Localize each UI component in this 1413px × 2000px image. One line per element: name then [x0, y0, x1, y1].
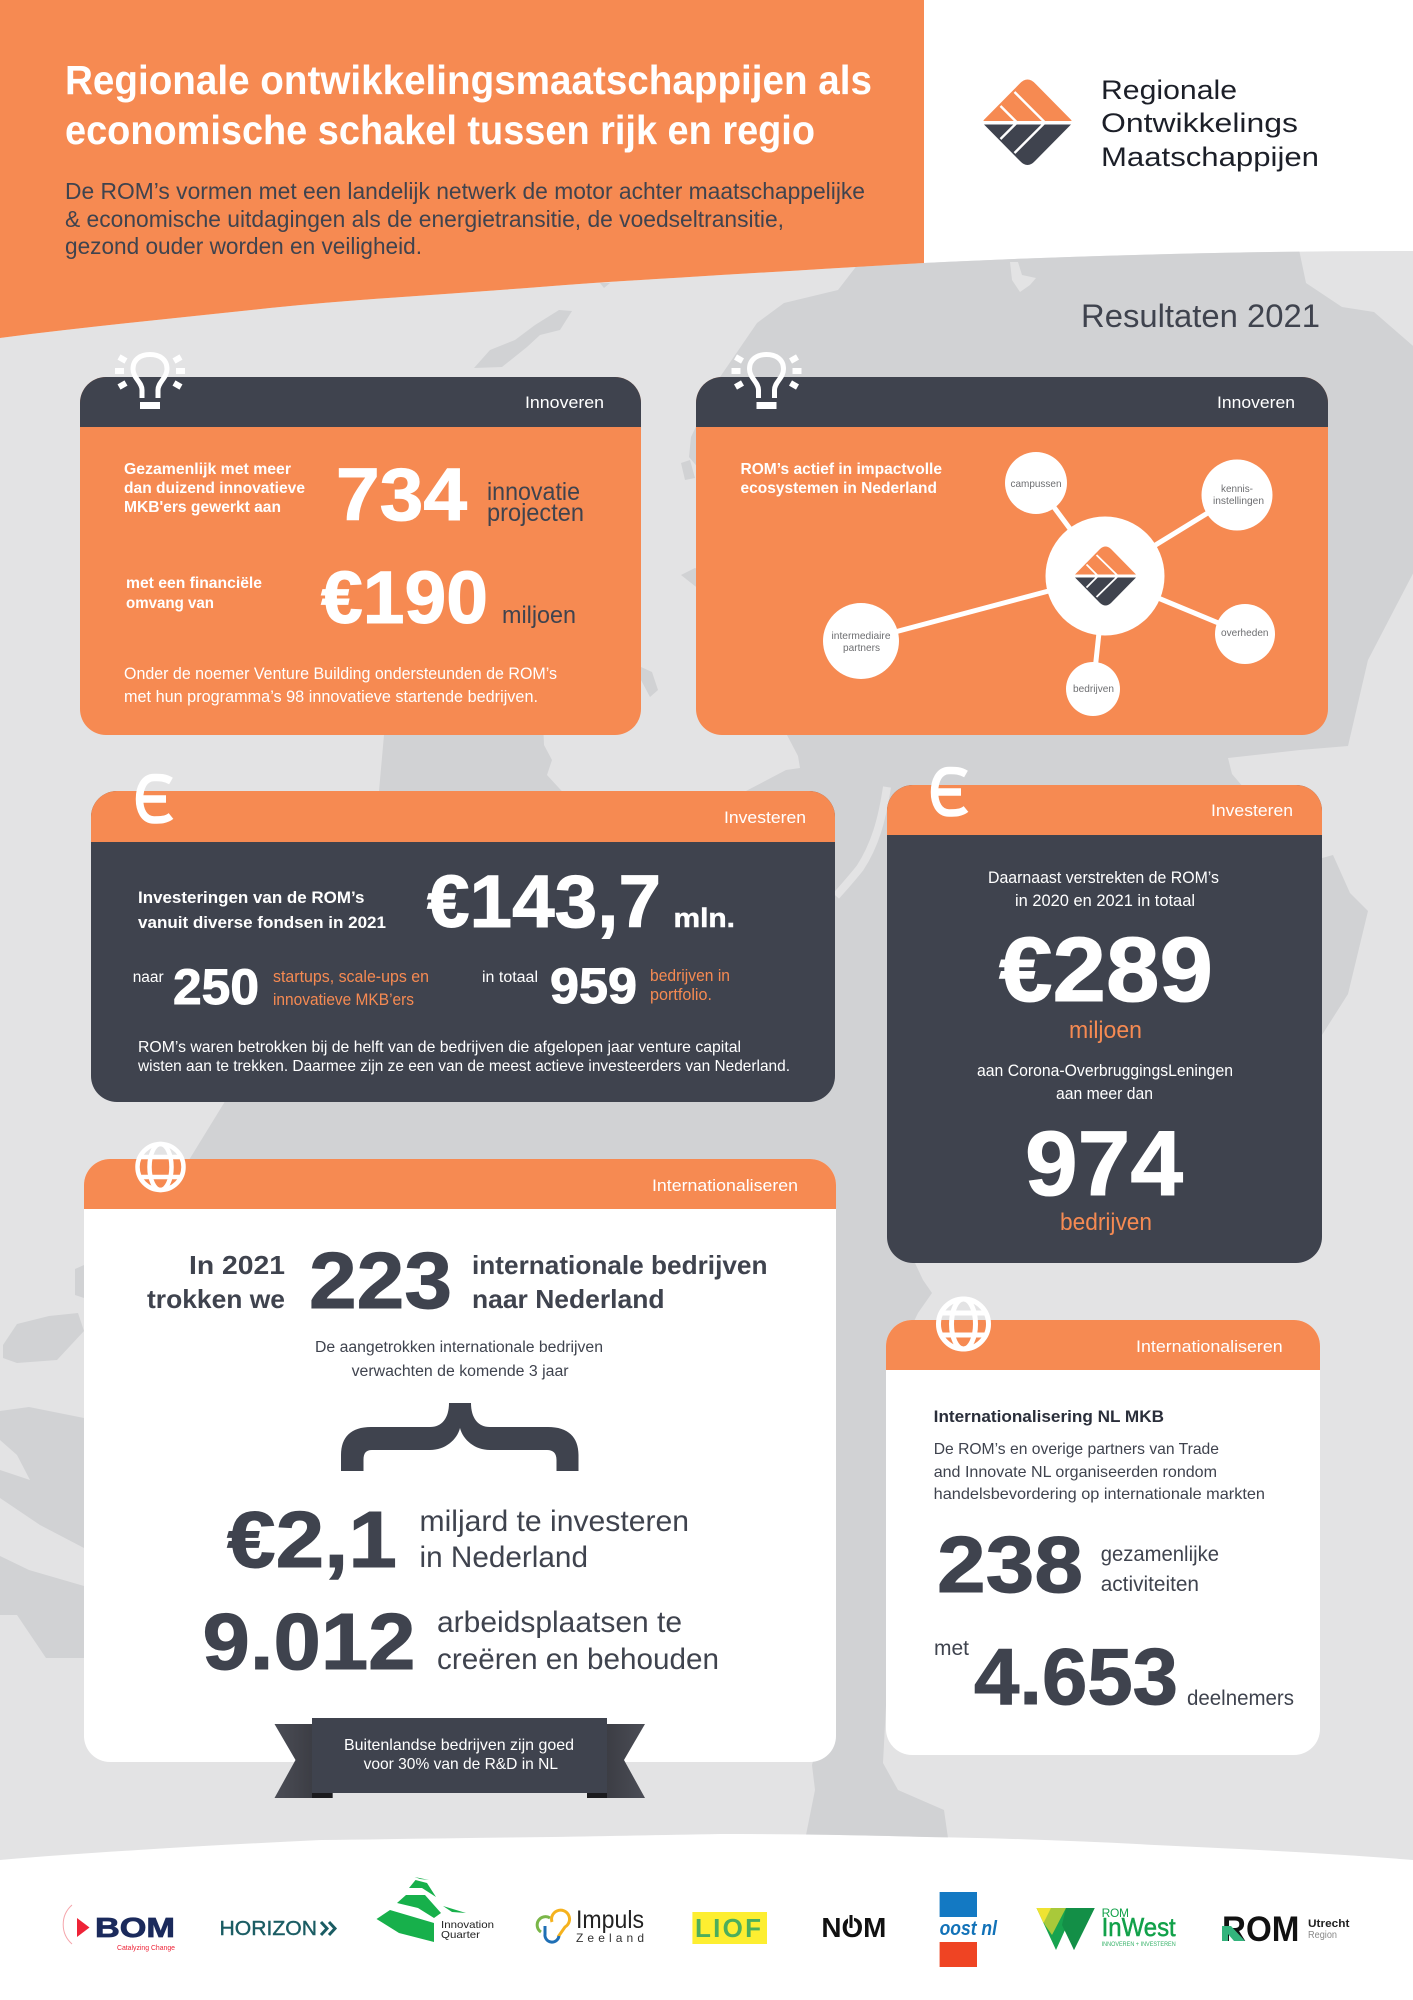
- stat group: 959 portfolio: in totaal: [482, 969, 538, 986]
- stat: 289: €289: [999, 919, 1213, 1021]
- logo: oost nl: oost nl: [940, 1918, 997, 1940]
- text: additional loans: [988, 869, 1219, 910]
- text: internationale bedrijven: naar Nederland: [472, 1284, 664, 1314]
- text: venture capital: wisten aan te trekken. Daarmee zijn ze een van de meest actieve investeerders van Nederland.: [137, 1058, 790, 1075]
- icon: curly brace: [341, 1403, 578, 1471]
- text: internationale bedrijven: internationale bedrijven: [472, 1250, 768, 1280]
- icon: light bulb: [115, 354, 185, 409]
- text: trade promotion: De ROM’s en overige partners van Trade: [934, 1441, 1219, 1458]
- label: miljoen: miljoen: [1069, 1017, 1142, 1044]
- text: venture building: Onder de noemer Venture Building ondersteunden de ROM’s: [124, 665, 557, 683]
- label: innovatie projecten: projecten: [487, 499, 584, 527]
- icon: ROM logo: [984, 80, 1071, 165]
- text: expectations: De aangetrokken internationale bedrijven: [315, 1339, 603, 1356]
- panel: Investeren funds: [91, 777, 835, 1102]
- logo: Innovation Quarter: [376, 1877, 494, 1942]
- text: venture capital: ROM’s waren betrokken bij de helft van de bedrijven die afgelopen jaar venture capital: [138, 1039, 741, 1056]
- label: bedrijven: bedrijven: [1060, 1209, 1152, 1236]
- stat group: 959 portfolio: [482, 958, 730, 1014]
- icon: ROM logo small: [1075, 546, 1136, 606]
- stat: 9.012 jobs: arbeidsplaatsen te: [437, 1606, 682, 1639]
- intro text: [65, 178, 865, 259]
- header label: Innoveren: [1217, 393, 1295, 412]
- icon: globe: [138, 1144, 184, 1190]
- label: gezamenlijke activiteiten: activiteiten: [1101, 1573, 1199, 1596]
- stat group: 250 startups: 250: [173, 959, 259, 1015]
- text: expectations: verwachten de komende 3 jaar: [352, 1363, 569, 1380]
- logo: LIOF: LIOF: [695, 1913, 761, 1943]
- node: campussen: campussen: [1010, 478, 1062, 490]
- text: trade promotion: and Innovate NL organiseerden rondom: [934, 1464, 1217, 1481]
- stat: 4.653: 4.653: [974, 1632, 1178, 1721]
- stat group: 250 startups: startups, scale-ups en: [273, 968, 429, 986]
- text: expectations: [315, 1339, 603, 1380]
- stat group: 959 portfolio: bedrijven in: [650, 967, 730, 985]
- stat: 9.012 jobs: 9.012: [202, 1597, 416, 1686]
- ribbon callout: voor 30% van de R&D in NL: [364, 1756, 558, 1773]
- stat: 2,1 miljard: €2,1: [227, 1495, 397, 1584]
- text: ecosystems: ecosystemen in Nederland: [740, 480, 937, 497]
- text: intro: [124, 461, 305, 516]
- orange header banner: [0, 0, 924, 338]
- ribbon callout: Buitenlandse bedrijven zijn goed: [344, 1737, 574, 1754]
- node: campussen: [1005, 452, 1067, 514]
- text: investments: [138, 889, 386, 932]
- label: met: met: [934, 1637, 969, 1660]
- node: kennisinstellingen: [1202, 460, 1272, 530]
- stat group: 250 startups: [133, 959, 429, 1015]
- text: In 2021 trokken we: trokken we: [147, 1284, 285, 1314]
- intro text: & economische uitdagingen als de energietransitie, de voedseltransitie,: [65, 206, 784, 232]
- text: financial scope: [126, 575, 262, 612]
- text: corona loans: [977, 1062, 1233, 1103]
- header label: Internationaliseren: [1136, 1337, 1283, 1356]
- text: trade promotion: handelsbevordering op internationale markten: [934, 1486, 1265, 1503]
- text: additional loans: in 2020 en 2021 in totaal: [1015, 892, 1195, 910]
- text: corona loans: aan meer dan: [1056, 1085, 1153, 1103]
- stat group: 959 portfolio: 959: [550, 958, 637, 1014]
- intro text: gezond ouder worden en veiligheid.: [65, 233, 422, 259]
- logo: Horizon: HORIZON: [220, 1918, 317, 1940]
- logo: NOM: NOM: [821, 1912, 886, 1943]
- logo: Impuls Zeeland: [537, 1906, 644, 1945]
- stat: 2,1 miljard: in Nederland: [420, 1541, 588, 1574]
- text: financial scope: omvang van: [126, 595, 214, 612]
- logo wordmark: [1101, 75, 1319, 172]
- logo: Innovation Quarter: Innovation: [441, 1919, 494, 1931]
- node: bedrijven: [1066, 662, 1120, 716]
- intro text: De ROM’s vormen met een landelijk netwerk de motor achter maatschappelijke: [65, 178, 865, 204]
- icon: light bulb: [732, 354, 802, 409]
- logo: BOM: BOM: [95, 1912, 175, 1943]
- logo: ROM InWest: [1036, 1906, 1176, 1950]
- stat group: 250 startups: innovatieve MKB’ers: [273, 991, 414, 1009]
- node: overheden: overheden: [1221, 627, 1269, 639]
- stat: 734: 734: [336, 453, 467, 536]
- logo: BOM: Catalyzing Change: [117, 1943, 175, 1952]
- stat: 974: 974: [1025, 1113, 1183, 1215]
- text: investments: vanuit diverse fondsen in 2021: [138, 914, 386, 932]
- network diagram: [823, 452, 1275, 716]
- stat: 9.012 jobs: [202, 1597, 719, 1686]
- logo wordmark: Regionale: [1101, 75, 1237, 105]
- logo: ROM Utrecht Region: ROM: [1222, 1910, 1299, 1949]
- node: intermediaire partners: partners: [843, 642, 880, 654]
- text: In 2021 trokken we: In 2021: [189, 1250, 285, 1280]
- heading: Resultaten 2021: Resultaten 2021: [1081, 298, 1320, 334]
- label: gezamenlijke activiteiten: gezamenlijke: [1101, 1543, 1219, 1566]
- text: venture building: [124, 665, 557, 706]
- label: miljoen: miljoen: [502, 602, 576, 629]
- node: bedrijven: bedrijven: [1073, 683, 1114, 695]
- label: innovatie projecten: innovatie: [487, 478, 580, 506]
- label: deelnemers: deelnemers: [1187, 1687, 1294, 1710]
- stat: 223: 223: [309, 1236, 452, 1325]
- icon: euro: [140, 777, 171, 820]
- logo: ROM InWest: ROM: [1102, 1906, 1129, 1920]
- header label: Internationaliseren: [652, 1176, 798, 1195]
- node: overheden: [1215, 604, 1275, 664]
- logo: BOM: [63, 1905, 175, 1952]
- header label: Investeren: [724, 808, 806, 827]
- logo: oost nl: [940, 1892, 997, 1967]
- panel: Internationaliseren companies: [84, 1144, 836, 1762]
- logo wordmark: Ontwikkelings: [1101, 108, 1298, 138]
- logo: Impuls Zeeland: Impuls: [576, 1906, 644, 1934]
- text: financial scope: met een financiële: [126, 575, 262, 592]
- header label: Investeren: [1211, 801, 1293, 820]
- text: additional loans: Daarnaast verstrekten de ROM’s: [988, 869, 1219, 887]
- panel: Innoveren ecosystems: [696, 354, 1328, 735]
- subheading: Internationalisering NL MKB: [934, 1407, 1164, 1426]
- text: investments: Investeringen van de ROM’s: [138, 889, 364, 907]
- stat: 2,1 miljard: [227, 1495, 689, 1584]
- panel: Innoveren projects: [80, 354, 641, 735]
- node: kennisinstellingen: kennis-: [1221, 483, 1253, 495]
- text: ecosystems: ROM’s actief in impactvolle: [740, 461, 942, 478]
- panel: Investeren corona loans: [887, 770, 1322, 1263]
- text: In 2021 trokken we: [147, 1250, 285, 1314]
- icon: euro: [934, 770, 966, 813]
- icon: globe: [938, 1299, 988, 1349]
- stat: 9.012 jobs: creëren en behouden: [437, 1643, 719, 1676]
- text: venture capital: [137, 1039, 790, 1075]
- label: mln.: mln.: [674, 903, 735, 933]
- node: intermediaire partners: intermediaire: [832, 630, 891, 642]
- logo: ROM InWest: InWest: [1102, 1912, 1176, 1942]
- text: ecosystems: [740, 461, 942, 497]
- text: intro: MKB'ers gewerkt aan: [124, 499, 281, 516]
- logo: Impuls Zeeland: Zeeland: [576, 1931, 644, 1945]
- ribbon callout: [274, 1718, 645, 1798]
- text: internationale bedrijven: [472, 1250, 768, 1314]
- logo: ROM Utrecht Region: [1222, 1910, 1350, 1949]
- stat: 190 million: €190: [321, 556, 488, 639]
- stat: 143,7: €143,7: [427, 860, 661, 943]
- label: gezamenlijke activiteiten: [1101, 1543, 1219, 1596]
- logo: ROM Utrecht Region: Region: [1308, 1930, 1337, 1941]
- node: kennisinstellingen: instellingen: [1213, 495, 1264, 507]
- title: [65, 57, 872, 153]
- node: intermediaire partners: [823, 603, 899, 679]
- text: trade promotion: [934, 1441, 1265, 1503]
- text: corona loans: aan Corona-OverbruggingsLeningen: [977, 1062, 1233, 1080]
- logo: ROM Utrecht Region: Utrecht: [1308, 1918, 1350, 1930]
- stat group: 250 startups: naar: [133, 969, 164, 986]
- text: venture building: met hun programma’s 98 innovatieve startende bedrijven.: [124, 688, 538, 706]
- stat: 2,1 miljard: miljard te investeren: [420, 1505, 689, 1538]
- stat group: 959 portfolio: portfolio.: [650, 986, 712, 1004]
- panel: Internationaliseren MKB: [886, 1299, 1320, 1755]
- text: intro: dan duizend innovatieve: [124, 480, 305, 497]
- header label: Innoveren: [525, 393, 604, 412]
- logo: Innovation Quarter: Quarter: [441, 1929, 481, 1941]
- logo: ROM InWest: INNOVEREN + INVESTEREN: [1102, 1942, 1176, 1948]
- logo wordmark: Maatschappijen: [1101, 142, 1319, 172]
- title: economische schakel tussen rijk en regio: [65, 107, 815, 153]
- text: intro: Gezamenlijk met meer: [124, 461, 291, 478]
- label: innovatie projecten: [487, 478, 584, 527]
- title: Regionale ontwikkelingsmaatschappijen als: [65, 57, 872, 103]
- stat: 238: 238: [937, 1520, 1083, 1609]
